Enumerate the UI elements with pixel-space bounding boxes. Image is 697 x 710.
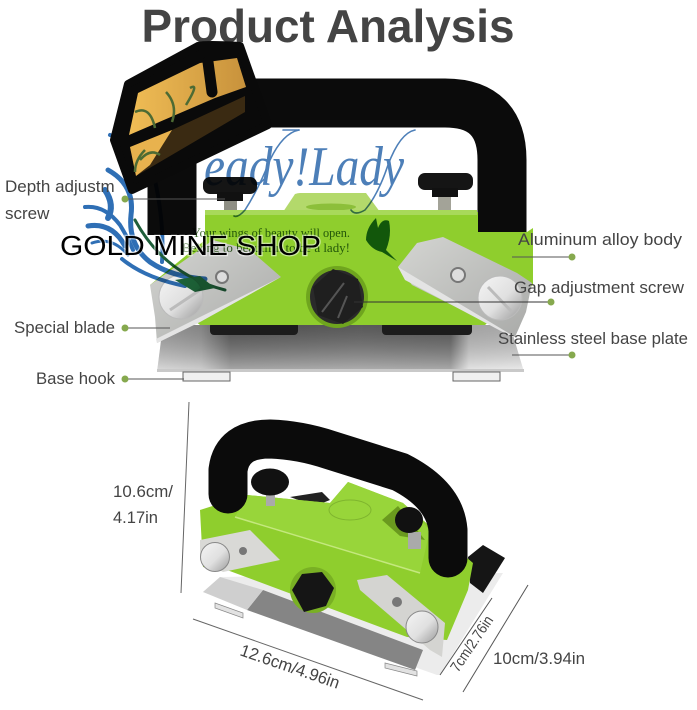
dimension: length: 12.6cm/4.96in — [238, 641, 342, 693]
label: base hook: Base hook — [36, 369, 115, 388]
depth screw left — [203, 177, 257, 222]
labels and leader lines — [5, 177, 688, 388]
angled left blade — [200, 530, 280, 572]
dimension: depth: 7cm/2.76in — [447, 613, 497, 675]
watermark name: eady!Lady — [204, 136, 404, 198]
title: Product Analysis — [142, 0, 514, 52]
label: depth adjustment screw — [5, 177, 225, 223]
angled bolt — [290, 567, 336, 613]
angled green body — [200, 482, 473, 640]
dimension: height: 10.6cm/ — [113, 482, 173, 501]
shop watermark text: GOLD MINE SHOP — [60, 230, 321, 261]
dimension: length — [193, 619, 423, 700]
dimension: height: 4.17in — [113, 508, 158, 527]
label: aluminum alloy body — [512, 230, 683, 260]
angled black block — [468, 545, 505, 593]
label: gap adjustment screw — [354, 278, 685, 306]
product angled view — [200, 439, 505, 676]
angled depth screw right — [395, 507, 423, 549]
label: depth adjustment screw: screw — [5, 204, 50, 223]
label: stainless steel base plate: Stainless steel base plate — [498, 329, 688, 348]
angled bracket behind body — [290, 492, 330, 506]
label: gap adjustment screw: Gap adjustment screw — [514, 278, 685, 297]
dimension: height — [113, 402, 189, 593]
angled base plate — [203, 573, 503, 676]
base plate — [157, 325, 524, 381]
icon: gold badge — [114, 45, 268, 190]
label: depth adjustment screw: Depth adjustm — [5, 177, 115, 196]
product front view — [150, 103, 533, 381]
black feet pads — [210, 322, 472, 335]
icon: butterfly — [366, 218, 397, 261]
watermark tagline: Belong to beautiful to be a lady! — [182, 240, 350, 255]
watermark swashes — [234, 130, 415, 216]
angled right blade — [357, 575, 445, 657]
angled handle — [228, 439, 448, 558]
green body — [150, 193, 533, 325]
dimension: width — [463, 585, 585, 692]
gap adjustment bolt — [306, 266, 368, 328]
label: stainless steel base plate — [498, 329, 688, 358]
label: aluminum alloy body: Aluminum alloy body — [518, 230, 683, 249]
right blade — [398, 237, 532, 337]
left blade — [150, 240, 281, 343]
label: special blade — [14, 318, 170, 337]
watermark tagline: Your wings of beauty will open. — [192, 225, 350, 240]
watermark floral swirl — [85, 125, 225, 292]
dimension: width: 10cm/3.94in — [493, 649, 585, 668]
label: special blade: Special blade — [14, 318, 115, 337]
label: base hook — [36, 369, 184, 388]
handle — [172, 103, 502, 235]
watermark — [85, 125, 415, 292]
watermark tagline — [182, 225, 350, 255]
angled depth screw left — [251, 468, 289, 506]
depth screw right — [418, 173, 473, 217]
